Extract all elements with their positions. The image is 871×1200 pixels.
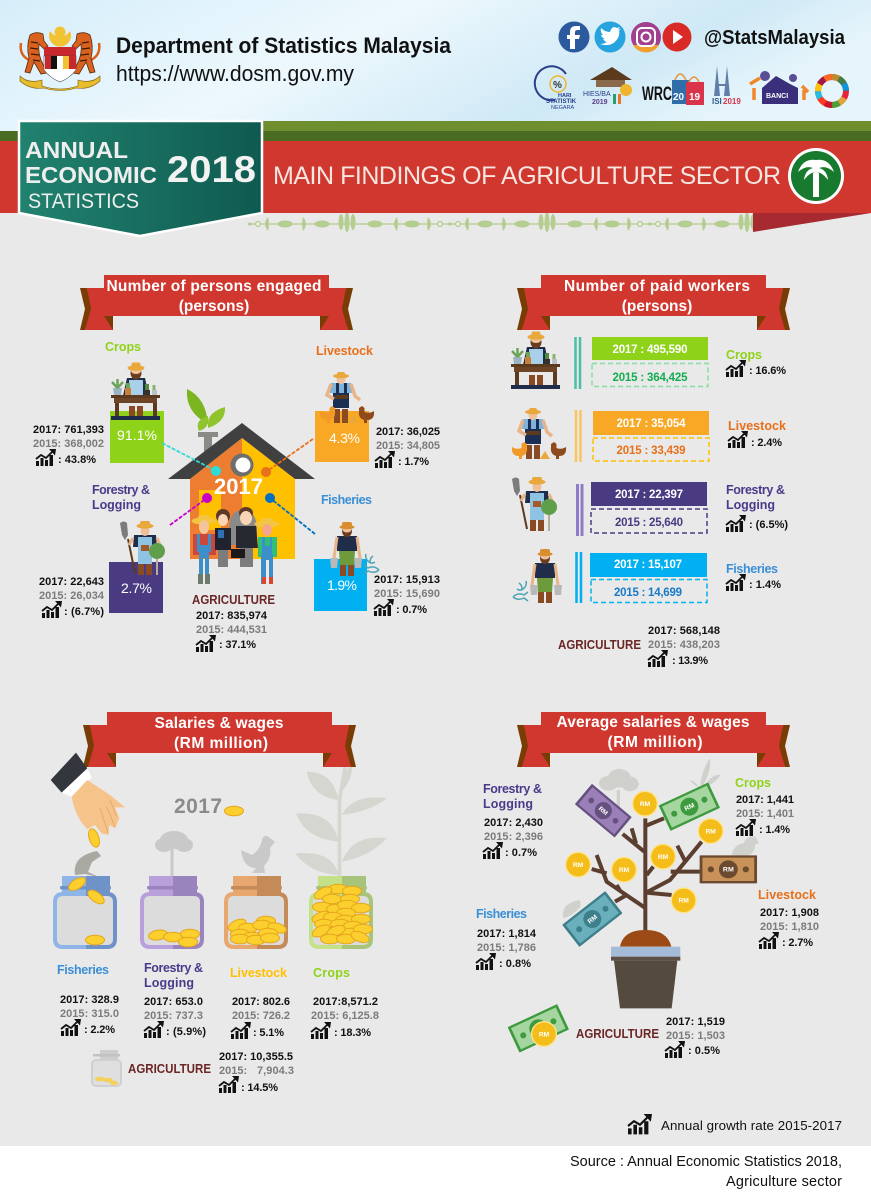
forestry and logging category: Logging <box>92 498 141 512</box>
stats: forestry and logging <box>483 782 543 859</box>
partner event logos: STATISTIK <box>546 99 577 105</box>
fisheries category: 1.9% <box>327 577 357 593</box>
stats: forestry and logging: Forestry & <box>144 961 203 975</box>
livestock category <box>315 344 440 468</box>
agriculture total with small jar: 7,904.3 <box>257 1065 294 1077</box>
teal report badge: 2018 <box>167 149 256 190</box>
jar: livestock <box>226 836 287 948</box>
connector dots <box>202 466 275 503</box>
house illustration <box>168 423 315 559</box>
stats: crops <box>311 966 379 1039</box>
stats: forestry and logging: : (5.9%) <box>166 1026 206 1038</box>
forestry and logging category: 2.7% <box>121 580 152 596</box>
banner: average salaries: Average salaries & wages <box>556 714 750 731</box>
stats: livestock <box>230 966 290 1039</box>
fisheries category: Fisheries <box>321 493 372 507</box>
banner: salaries and wages: Salaries & wages <box>154 715 284 732</box>
row: livestock: : 2.4% <box>751 437 782 449</box>
row: crops: 2015 : 364,425 <box>612 372 688 384</box>
stats: livestock: Livestock <box>758 888 816 902</box>
fisheries category <box>314 493 440 616</box>
stats: crops: Crops <box>735 776 771 790</box>
crops category: : 43.8% <box>58 454 96 466</box>
row: crops: 2017 : 495,590 <box>612 344 688 356</box>
stats: forestry and logging: 2017: 653.0 <box>144 996 203 1008</box>
stats: crops <box>735 776 794 836</box>
agriculture total: 2017: 1,519 <box>666 1016 725 1028</box>
partner event logos: 19 <box>689 92 701 103</box>
stats: fisheries: 2017: 1,814 <box>477 928 537 940</box>
fisheries category: 2017: 15,913 <box>374 574 440 586</box>
stats: crops: 2017:8,571.2 <box>313 996 378 1008</box>
house illustration: 2017 <box>214 474 263 499</box>
agriculture total: 2015: 1,503 <box>666 1030 725 1042</box>
partner event logos: WRC <box>642 84 672 105</box>
stats: livestock <box>758 888 819 949</box>
stats: fisheries: Fisheries <box>476 907 527 921</box>
coat of arms logo <box>20 26 100 90</box>
panel: persons engaged <box>33 275 440 652</box>
teal report badge: ANNUAL <box>25 137 128 163</box>
panel: salaries and wages <box>51 712 387 1094</box>
legend: annual growth rate: Annual growth rate 2015-2017 <box>661 1118 842 1133</box>
forestry and logging category: : (6.7%) <box>64 606 104 618</box>
row: forestry and logging <box>512 477 788 536</box>
agriculture total <box>192 592 275 652</box>
row: livestock <box>512 408 786 462</box>
banner: paid workers: (persons) <box>622 298 692 315</box>
source note: Agriculture sector <box>726 1174 842 1190</box>
stats: livestock: : 2.7% <box>782 937 813 949</box>
partner event logos: HARI <box>558 93 572 99</box>
stats: forestry and logging: 2015: 737.3 <box>144 1010 203 1022</box>
livestock category: 4.3% <box>329 430 360 446</box>
row: livestock: 2015 : 33,439 <box>616 445 686 457</box>
stats: fisheries: 2017: 328.9 <box>60 994 119 1006</box>
stats: fisheries: 2015: 315.0 <box>60 1008 119 1020</box>
partner event logos: NEGARA <box>551 105 575 111</box>
banner: average salaries: (RM million) <box>608 734 702 751</box>
partner event logos: BANCI <box>766 93 788 100</box>
partner event logos <box>535 66 846 111</box>
stats: fisheries: : 0.8% <box>499 958 531 970</box>
row: livestock: 2017 : 35,054 <box>616 418 686 430</box>
banner: persons engaged: Number of persons engaged <box>106 278 322 295</box>
partner event logos: ISI <box>712 97 722 106</box>
stats: forestry and logging: 2017: 2,430 <box>484 817 543 829</box>
agriculture total: : 13.9% <box>672 655 708 667</box>
banner: paid workers <box>517 275 790 330</box>
banner: average salaries <box>517 712 790 767</box>
partner event logos: HIES/BA <box>583 91 611 98</box>
agriculture total: : 37.1% <box>219 639 256 651</box>
teal report badge: STATISTICS <box>28 190 139 213</box>
row: forestry and logging: Logging <box>726 498 775 512</box>
legend: annual growth rate <box>628 1114 842 1134</box>
agriculture total: 2015: 444,531 <box>196 624 267 636</box>
jar: crops <box>310 876 372 948</box>
crops category: 2015: 368,002 <box>33 438 104 450</box>
partner event logos: % <box>553 80 562 91</box>
crops category: Crops <box>105 340 141 354</box>
partner event logos: 2019 <box>592 99 608 106</box>
row: forestry and logging: Forestry & <box>726 483 785 497</box>
crops category: 91.1% <box>117 427 157 443</box>
agriculture total with small jar: 2017: 10,355.5 <box>219 1051 293 1063</box>
plant silhouette <box>295 765 387 877</box>
partner event logos: 2019 <box>723 97 741 106</box>
jar: fisheries <box>55 851 115 948</box>
agriculture total: AGRICULTURE <box>576 1026 659 1041</box>
agriculture total <box>558 625 720 667</box>
stats: livestock: : 5.1% <box>253 1027 284 1039</box>
stats: fisheries: Fisheries <box>57 963 109 977</box>
agriculture total with small jar: AGRICULTURE <box>128 1061 211 1076</box>
connector lines <box>162 439 315 534</box>
row: fisheries: : 1.4% <box>749 579 781 591</box>
agriculture total: AGRICULTURE <box>192 592 275 607</box>
fisheries category: : 0.7% <box>396 604 427 616</box>
livestock category: : 1.7% <box>398 456 429 468</box>
row: forestry and logging: 2015 : 25,640 <box>615 517 683 529</box>
crops category <box>33 340 164 466</box>
stats: crops: : 18.3% <box>334 1027 371 1039</box>
agriculture total: AGRICULTURE <box>558 637 641 652</box>
stats: forestry and logging: Forestry & <box>483 782 542 796</box>
2017 label <box>174 795 244 818</box>
agriculture total with small jar: 2015: <box>219 1065 247 1077</box>
row: crops <box>511 332 786 389</box>
stats: crops: 2017: 1,441 <box>736 794 794 806</box>
stats: forestry and logging: Logging <box>144 976 194 990</box>
forestry and logging category: Forestry & <box>92 483 150 497</box>
livestock category: 2017: 36,025 <box>376 426 440 438</box>
forestry and logging category: 2015: 26,034 <box>39 590 105 602</box>
forestry and logging category <box>39 483 165 618</box>
icon: palm tree <box>788 148 844 204</box>
row: crops: Crops <box>726 348 762 362</box>
website url: https://www.dosm.gov.my <box>116 61 354 86</box>
stats: crops: Crops <box>313 966 350 980</box>
2017 label: 2017 <box>174 795 222 818</box>
stats: crops: 2015: 1,401 <box>736 808 794 820</box>
row: fisheries: Fisheries <box>726 562 778 576</box>
stats: fisheries: 2015: 1,786 <box>477 942 536 954</box>
banner: persons engaged: (persons) <box>179 298 249 315</box>
stats: forestry and logging: Logging <box>483 797 533 811</box>
plant on chimney <box>187 389 225 453</box>
red title band <box>0 141 871 235</box>
source note <box>570 1154 842 1190</box>
banner: salaries and wages <box>83 712 356 767</box>
stats: livestock: 2015: 1,810 <box>760 921 819 933</box>
agriculture total: : 0.5% <box>688 1045 720 1057</box>
fisheries category: 2015: 15,690 <box>374 588 440 600</box>
social media icons <box>558 22 692 53</box>
stats: crops: : 1.4% <box>759 824 790 836</box>
stats: livestock: 2015: 726.2 <box>232 1010 290 1022</box>
banner: salaries and wages: (RM million) <box>174 735 268 752</box>
row: fisheries <box>513 549 781 603</box>
livestock category: Livestock <box>316 344 373 358</box>
agriculture total with small jar: : 14.5% <box>241 1082 278 1094</box>
source note: Source : Annual Economic Statistics 2018, <box>570 1154 842 1170</box>
jar: forestry and logging <box>142 831 202 948</box>
stats: forestry and logging <box>144 961 206 1038</box>
row: livestock: Livestock <box>728 419 786 433</box>
row: crops: : 16.6% <box>749 365 786 377</box>
crops category: 2017: 761,393 <box>33 424 104 436</box>
panel: average salaries and wages <box>476 712 819 1058</box>
twitter handle: @StatsMalaysia <box>704 27 846 49</box>
agriculture total with small jar <box>92 1050 294 1094</box>
main title: MAIN FINDINGS OF AGRICULTURE SECTOR <box>273 162 781 190</box>
agriculture total: 2015: 438,203 <box>648 639 720 651</box>
department name: Department of Statistics Malaysia <box>116 33 452 58</box>
stats: forestry and logging: 2015: 2,396 <box>484 831 543 843</box>
teal report badge: ECONOMIC <box>25 162 157 188</box>
stats: crops: 2015: 6,125.8 <box>311 1010 379 1022</box>
stats: livestock: 2017: 802.6 <box>232 996 290 1008</box>
banner: paid workers: Number of paid workers <box>564 278 750 295</box>
livestock category: 2015: 34,805 <box>376 440 440 452</box>
stats: livestock: 2017: 1,908 <box>760 907 819 919</box>
stats: fisheries: : 2.2% <box>84 1024 115 1036</box>
stats: forestry and logging: : 0.7% <box>505 847 537 859</box>
money tree <box>508 758 759 1053</box>
green header stripe <box>0 121 871 141</box>
stats: livestock: Livestock <box>230 966 287 980</box>
forestry and logging category: 2017: 22,643 <box>39 576 104 588</box>
header background <box>0 0 871 131</box>
panel: paid workers <box>511 275 790 667</box>
stats: fisheries <box>57 963 119 1036</box>
row: forestry and logging: : (6.5%) <box>749 519 788 531</box>
row: fisheries: 2017 : 15,107 <box>614 559 682 571</box>
agriculture total: 2017: 835,974 <box>196 610 268 622</box>
footer background <box>0 1146 871 1200</box>
row: fisheries: 2015 : 14,699 <box>614 587 682 599</box>
agriculture total <box>576 1016 725 1058</box>
banner: persons engaged <box>80 275 353 330</box>
agriculture total: 2017: 568,148 <box>648 625 720 637</box>
partner event logos: 20 <box>673 92 685 103</box>
teal report badge <box>19 121 262 236</box>
stats: fisheries <box>476 907 537 970</box>
row: forestry and logging: 2017 : 22,397 <box>615 489 683 501</box>
group of workers <box>192 507 280 584</box>
hand dropping coin <box>51 753 125 849</box>
